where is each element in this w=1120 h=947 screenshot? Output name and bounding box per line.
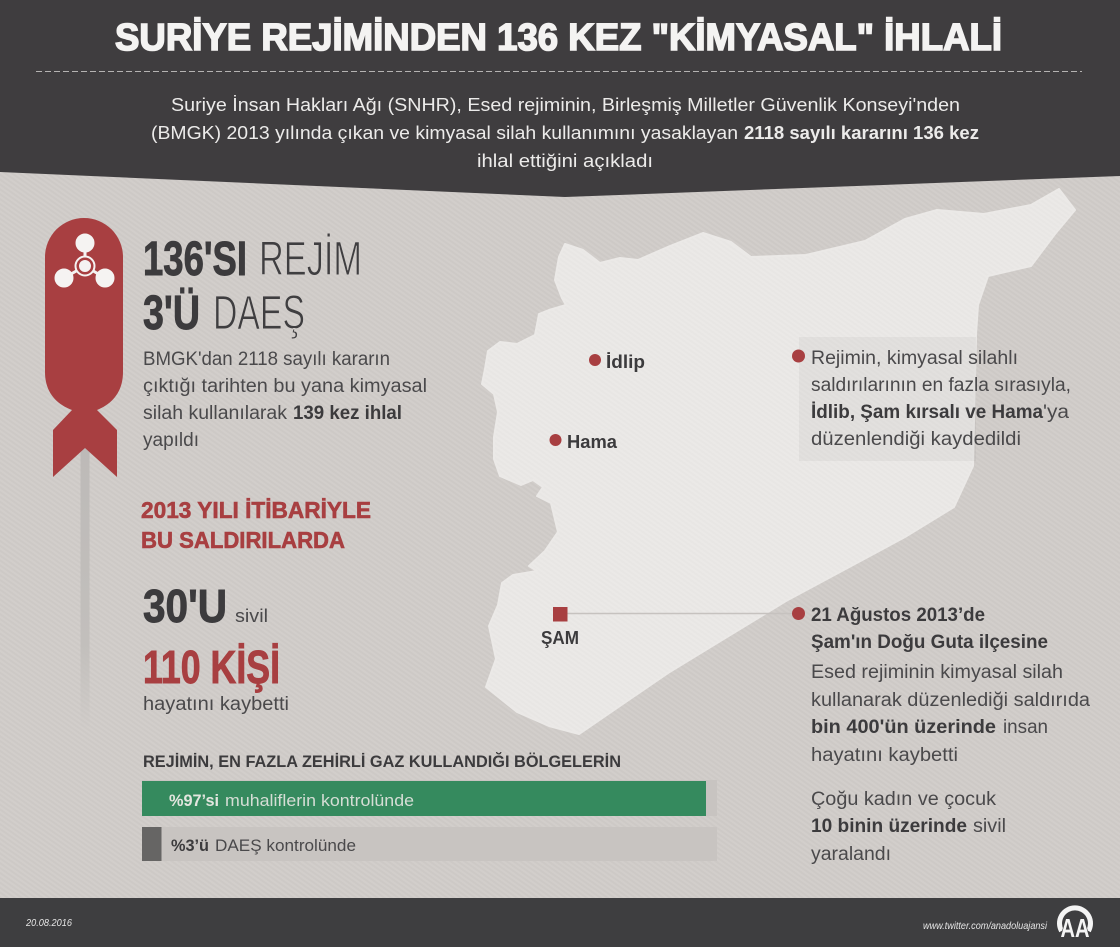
callout: Eastern Ghouta attack: Şam'ın Doğu Guta ilçesine <box>811 632 1048 653</box>
callout: most attacked regions: İdlib, Şam kırsalı ve Hama <box>811 402 1043 423</box>
subtitle: Suriye İnsan Hakları Ağı (SNHR), Esed rejiminin, Birleşmiş Milletler Güvenlik Konseyi'nden <box>171 95 960 115</box>
subtitle <box>151 95 979 171</box>
twitter url: www.twitter.com/anadoluajansi <box>923 921 1048 932</box>
callout: most attacked regions: 'ya <box>1043 402 1069 423</box>
callout: most attacked regions: düzenlendiği kaydedildi <box>811 429 1021 450</box>
bomb icon <box>45 218 123 730</box>
stat: 30 civilians: 30'U <box>143 580 227 632</box>
bar chart: control of regions: %3’ü <box>171 836 209 855</box>
paragraph: violations: silah kullanılarak <box>143 403 288 424</box>
icon: chemical hazard <box>55 234 114 287</box>
callout: Eastern Ghouta attack: 21 Ağustos 2013’de <box>811 605 985 626</box>
stat: 30 civilians: sivil <box>235 606 268 626</box>
bar chart: control of regions: muhaliflerin kontrolünde <box>225 791 414 810</box>
callout: Eastern Ghouta attack: hayatını kaybetti <box>811 745 958 766</box>
stat: 110 people: 110 KİŞİ <box>143 641 280 693</box>
headline: 136 and 3: DAEŞ <box>213 287 305 340</box>
title: SURİYE REJİMİNDEN 136 KEZ "KİMYASAL" İHLALİ <box>115 17 1002 59</box>
bar chart: control of regions: DAEŞ kontrolünde <box>215 836 356 855</box>
stat: 110 people: hayatını kaybetti <box>143 694 289 715</box>
subtitle: (BMGK) 2013 yılında çıkan ve kimyasal silah kullanımını yasaklayan <box>151 123 738 143</box>
headline: 136 and 3: REJİM <box>259 233 362 286</box>
icon: AA logo: AA <box>1060 913 1090 943</box>
callout: Eastern Ghouta attack: sivil <box>973 816 1006 837</box>
map label: Damascus with connector <box>541 607 798 648</box>
paragraph: violations: çıktığı tarihten bu yana kimyasal <box>143 376 427 397</box>
paragraph: violations <box>143 349 427 451</box>
callout: Eastern Ghouta attack: Esed rejiminin kimyasal silah <box>811 662 1063 683</box>
bar chart: control of regions: %97’si <box>169 791 219 810</box>
map label: Idlib <box>589 352 645 372</box>
map label: Damascus with connector: ŞAM <box>541 628 579 648</box>
headline: 136 and 3: 3'Ü <box>143 287 200 340</box>
icon: AA logo <box>1060 908 1091 943</box>
stat: 110 people <box>143 641 289 715</box>
callout: most attacked regions <box>792 348 1071 450</box>
subtitle: ihlal ettiğini açıkladı <box>477 151 653 171</box>
callout: Eastern Ghouta attack: yaralandı <box>811 844 891 865</box>
callout: Eastern Ghouta attack: Çoğu kadın ve çocuk <box>811 789 997 810</box>
callout: Eastern Ghouta attack: bin 400'ün üzerinde <box>811 717 996 738</box>
paragraph: violations: BMGK'dan 2118 sayılı kararın <box>143 349 390 370</box>
paragraph: violations: yapıldı <box>143 430 199 451</box>
map label: Idlib: İdlip <box>606 352 645 372</box>
callout: Eastern Ghouta attack: insan <box>1003 717 1048 738</box>
map of Syria <box>482 189 1075 734</box>
text backdrop <box>799 337 976 461</box>
red heading <box>141 497 371 553</box>
bar chart: control of regions <box>142 752 717 861</box>
callout: most attacked regions: Rejimin, kimyasal silahlı <box>811 348 1018 369</box>
callout: Eastern Ghouta attack: 10 binin üzerinde <box>811 816 967 837</box>
header band <box>0 0 1120 197</box>
map label: Hama: Hama <box>567 432 618 452</box>
subtitle: 2118 sayılı kararını 136 kez <box>744 123 979 143</box>
red heading: BU SALDIRILARDA <box>141 527 345 553</box>
callout: most attacked regions: saldırılarının en fazla sırasıyla, <box>811 375 1071 396</box>
headline: 136 and 3: 136'SI <box>143 233 247 286</box>
callout: Eastern Ghouta attack <box>792 605 1090 865</box>
paragraph: violations: 139 kez ihlal <box>293 403 402 424</box>
bar chart heading: REJİMİN, EN FAZLA ZEHİRLİ GAZ KULLANDIĞI BÖLGELERİN <box>143 752 621 771</box>
red heading: 2013 YILI İTİBARİYLE <box>141 497 371 523</box>
footer <box>0 898 1120 947</box>
date: 20.08.2016 <box>25 918 72 929</box>
headline: 136 and 3 <box>143 233 362 340</box>
callout: Eastern Ghouta attack: kullanarak düzenlediği saldırıda <box>811 690 1090 711</box>
